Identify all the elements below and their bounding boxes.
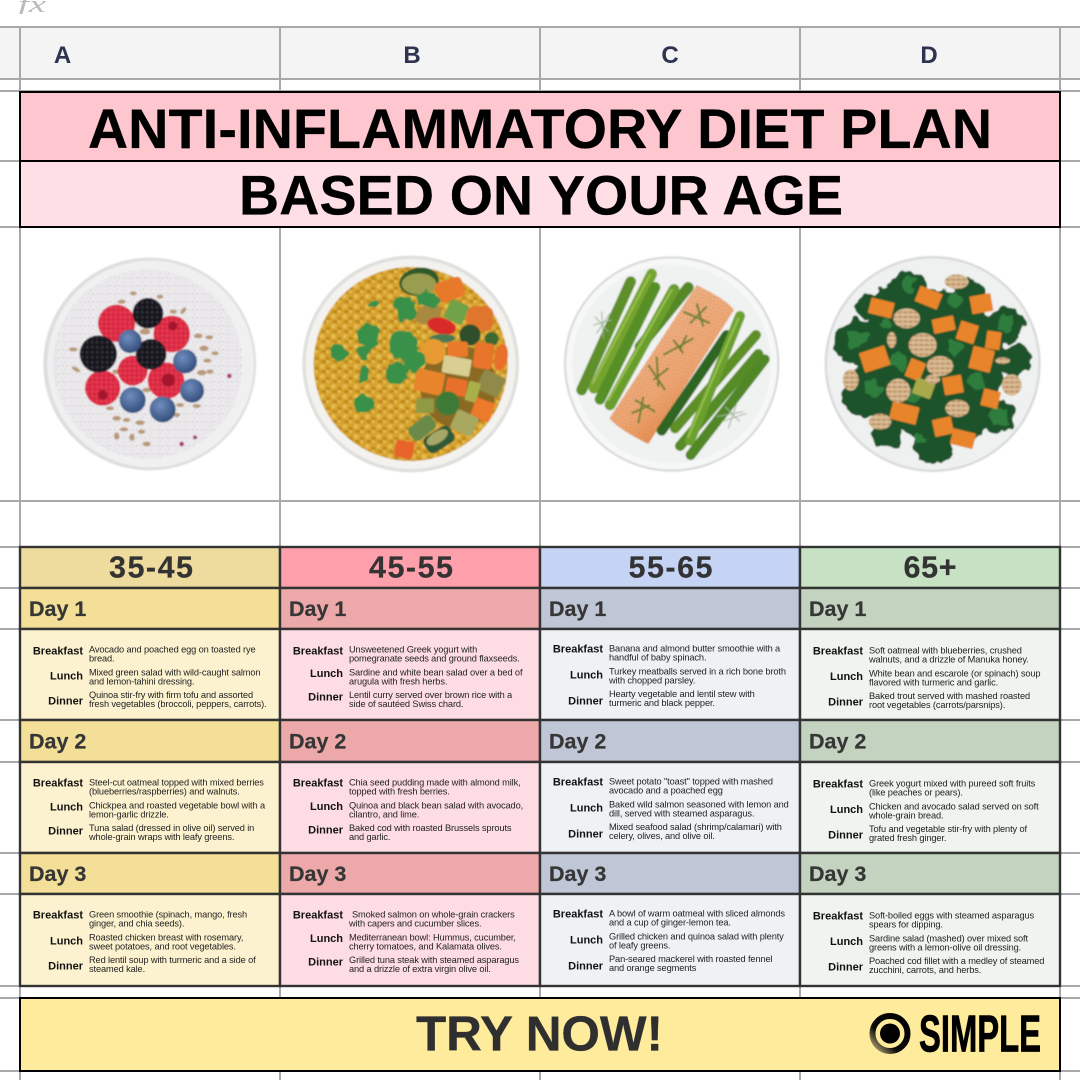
day 1 meals: and lemon-tahini dressing. (89, 676, 194, 686)
day 1 meals: Quinoa stir-fry with firm tofu and assorted (89, 690, 253, 700)
day 2 heading (280, 720, 540, 762)
simple logo (872, 1006, 1041, 1064)
spreadsheet column header bar: C (661, 42, 679, 69)
day 1 meals (20, 629, 280, 720)
day 1 meals: Hearty vegetable and lentil stew with (609, 689, 755, 699)
vegetables (394, 264, 510, 460)
spreadsheet column header bar: B (403, 42, 421, 69)
day 2 heading: Day 2 (809, 729, 866, 753)
day 2 meals: Breakfast (553, 776, 603, 788)
day 1 meals: walnuts, and a drizzle of Manuka honey. (868, 655, 1029, 665)
day 2 meals: Mixed seafood salad (shrimp/calamari) with (609, 822, 782, 832)
panel: age 45-55 (280, 547, 540, 986)
day 1 meals: Lentil curry served over brown rice with a (349, 690, 513, 700)
day 1 meals: Turkey meatballs served in a rich bone broth (609, 666, 786, 676)
day 2 meals: Breakfast (33, 778, 83, 790)
day 2 meals: Dinner (48, 826, 84, 838)
day 1 meals (800, 629, 1060, 720)
day 1 meals: Lunch (50, 670, 83, 682)
day 3 heading (800, 853, 1060, 894)
day 3 meals: greens with a lemon-olive oil dressing. (869, 942, 1021, 952)
day 3 meals: A bowl of warm oatmeal with sliced almonds (609, 909, 785, 919)
day 1 meals: Breakfast (813, 646, 863, 658)
day 1 meals: Breakfast (33, 645, 83, 657)
title (20, 92, 1060, 227)
day 2 meals: (like peaches or pears). (869, 788, 963, 798)
day 1 heading (800, 588, 1060, 629)
day 1 heading: Day 1 (289, 597, 346, 621)
day 3 heading (20, 853, 280, 894)
day 1 meals: Sardine and white bean salad over a bed of (349, 667, 523, 677)
day 2 meals: Steel-cut oatmeal topped with mixed berries (89, 778, 264, 788)
kale (834, 272, 1031, 464)
age header 35-45: 35-45 (109, 550, 193, 584)
day 3 meals: and a drizzle of extra virgin olive oil. (349, 964, 491, 974)
left asparagus (582, 274, 688, 405)
day 2 meals: Dinner (568, 829, 604, 841)
day 2 meals: grated fresh ginger. (869, 833, 946, 843)
day 1 heading (280, 588, 540, 629)
spreadsheet column header bar (0, 28, 1080, 79)
day 2 meals (280, 762, 540, 853)
day 1 meals: Lunch (570, 670, 603, 682)
day 1 meals: Dinner (308, 692, 344, 704)
day 1 meals: Lunch (310, 668, 343, 680)
day 1 heading (540, 588, 800, 629)
day 3 meals (800, 894, 1060, 986)
day 3 meals: Dinner (568, 961, 604, 973)
right asparagus (662, 316, 765, 455)
day 1 meals: Breakfast (293, 645, 343, 657)
day 1 meals: Mixed green salad with wild-caught salmon (89, 667, 260, 677)
day 2 meals: celery, olives, and olive oil. (609, 831, 715, 841)
day 3 meals: and orange segments (609, 963, 697, 973)
cilantro (330, 290, 436, 413)
day 2 meals: Breakfast (293, 778, 343, 790)
age header 65+ (800, 547, 1060, 588)
day 3 meals (20, 894, 280, 986)
day 3 meals: Green smoothie (spinach, mango, fresh (89, 910, 247, 920)
day 2 meals: lemon-garlic drizzle. (89, 809, 169, 819)
day 3 meals: Dinner (828, 962, 864, 974)
day 2 meals: Baked wild salmon seasoned with lemon and (609, 799, 789, 809)
day 2 meals: Breakfast (813, 779, 863, 791)
day 2 meals: whole-grain bread. (868, 810, 943, 820)
day 1 meals: Dinner (568, 696, 604, 708)
day 3 meals: Dinner (308, 957, 344, 969)
day 2 meals: Lunch (570, 803, 603, 815)
day 2 meals: Baked cod with roasted Brussels sprouts (349, 823, 512, 833)
day 1 heading: Day 1 (809, 597, 866, 621)
day 1 meals (280, 629, 540, 720)
day 1 meals: Banana and almond butter smoothie with a (609, 644, 781, 654)
day 3 meals: spears for dipping. (869, 920, 943, 930)
day 2 heading: Day 2 (549, 729, 606, 753)
title line 2 (20, 161, 1060, 227)
age header 45-55: 45-55 (369, 550, 453, 584)
day 1 meals: root vegetables (carrots/parsnips). (869, 700, 1005, 710)
day 3 meals: with capers and cucumber slices. (348, 919, 481, 929)
day 3 meals: Dinner (48, 961, 84, 973)
panel: age 35-45 (20, 547, 280, 986)
day 2 meals: Lunch (310, 801, 343, 813)
day 3 meals: sweet potatoes, and root vegetables. (89, 941, 236, 951)
day 2 meals: avocado and a poached egg (609, 786, 723, 796)
day 2 meals: (blueberries/raspberries) and walnuts. (89, 787, 240, 797)
day 1 meals: Baked trout served with mashed roasted (869, 691, 1030, 701)
day 1 meals (540, 629, 800, 720)
blueberries (118, 330, 204, 422)
day 3 meals: Poached cod fillet with a medley of steamed (869, 956, 1044, 966)
day 1 meals: with chopped parsley. (608, 675, 695, 685)
day 3 meals: cherry tomatoes, and Kalamata olives. (349, 941, 502, 951)
walnuts (843, 274, 1022, 430)
food photo: chickpea curry bowl with vegetables (302, 256, 519, 472)
day 2 meals: Quinoa and black bean salad with avocado, (349, 800, 523, 810)
day 2 meals (540, 762, 800, 853)
day 3 heading: Day 3 (289, 862, 346, 886)
day 3 meals: Soft-boiled eggs with steamed asparagus (869, 911, 1034, 921)
day 1 meals: pomegranate seeds and ground flaxseeds. (349, 654, 520, 664)
food photo: salmon fillet with asparagus on plate (564, 256, 779, 472)
day 2 meals: Chicken and avocado salad served on soft (869, 801, 1039, 811)
day 3 meals (540, 894, 800, 986)
day 3 meals: Lunch (570, 935, 603, 947)
day 2 meals: Greek yogurt mixed with pureed soft fruits (869, 779, 1036, 789)
day 1 meals: turmeric and black pepper. (609, 698, 715, 708)
day 2 heading (540, 720, 800, 762)
day 1 meals: White bean and escarole (or spinach) soup (869, 668, 1040, 678)
day 3 meals: Sardine salad (mashed) over mixed soft (869, 933, 1028, 943)
try now text: TRY NOW! (416, 1007, 663, 1062)
day 1 meals: Breakfast (553, 643, 603, 655)
day 3 meals: steamed kale. (89, 964, 145, 974)
panel: age 55-65 (540, 547, 800, 986)
sweet potato (859, 285, 1002, 449)
day 3 heading: Day 3 (809, 862, 866, 886)
day 2 meals: Dinner (308, 825, 344, 837)
day 2 meals (800, 762, 1060, 853)
day 2 meals (20, 762, 280, 853)
day 1 meals: bread. (89, 654, 115, 664)
day 3 meals: of leafy greens. (609, 940, 670, 950)
day 2 meals: Lunch (830, 804, 863, 816)
day 2 meals: Chickpea and roasted vegetable bowl with a (89, 800, 266, 810)
day 3 meals: Lunch (310, 933, 343, 945)
day 2 heading: Day 2 (29, 729, 86, 753)
day 1 meals: flavored with turmeric and garlic. (869, 677, 998, 687)
day 3 meals: and a cup of ginger-lemon tea. (609, 918, 731, 928)
day 1 meals: handful of baby spinach. (609, 653, 706, 663)
day 3 meals: Breakfast (553, 909, 603, 921)
day 2 meals: and garlic. (349, 832, 390, 842)
day 1 meals: Lunch (830, 671, 863, 683)
day 1 meals: Soft oatmeal with blueberries, crushed (869, 646, 1022, 656)
call to action banner (20, 998, 1060, 1071)
day 3 meals: zucchini, carrots, and herbs. (869, 965, 981, 975)
day 2 heading (20, 720, 280, 762)
day 3 meals: Smoked salmon on whole-grain crackers (352, 910, 515, 920)
day 1 meals: arugula with fresh herbs. (349, 676, 447, 686)
day 3 heading: Day 3 (29, 862, 86, 886)
day 3 heading (280, 853, 540, 894)
day 3 heading: Day 3 (549, 862, 606, 886)
day 2 meals: Tuna salad (dressed in olive oil) served in (89, 823, 254, 833)
day 1 meals: Dinner (48, 696, 84, 708)
age header 55-65: 55-65 (628, 550, 713, 584)
day 1 heading: Day 1 (29, 597, 86, 621)
blackberries (80, 298, 166, 373)
day 2 meals: whole-grain wraps with leafy greens. (88, 832, 234, 842)
day 3 meals: Lunch (50, 935, 83, 947)
day 1 meals: Dinner (828, 697, 864, 709)
day 1 meals: Unsweetened Greek yogurt with (349, 645, 477, 655)
day 1 heading: Day 1 (549, 597, 606, 621)
panel: age 65+ (800, 547, 1060, 986)
day 2 heading: Day 2 (289, 729, 346, 753)
day 3 meals: Grilled tuna steak with steamed asparagus (349, 955, 519, 965)
day 3 meals (280, 894, 540, 986)
age header 35-45 (20, 547, 280, 588)
day 3 meals: Breakfast (33, 910, 83, 922)
day 2 meals: dill, served with steamed asparagus. (609, 808, 754, 818)
day 2 meals: Dinner (828, 830, 864, 842)
spreadsheet column header bar: D (920, 42, 938, 69)
day 2 meals: cilantro, and lime. (349, 809, 419, 819)
day 1 meals: fresh vegetables (broccoli, peppers, carrots). (89, 699, 267, 709)
day 2 meals: topped with fresh berries. (349, 787, 450, 797)
title line 1: ANTI-INFLAMMATORY DIET PLAN (88, 98, 992, 160)
day 3 meals: Mediterranean bowl: Hummus, cucumber, (349, 932, 516, 942)
day 2 meals: Sweet potato "toast" topped with mashed (609, 777, 773, 787)
salmon (609, 285, 734, 444)
day 2 meals: Tofu and vegetable stir-fry with plenty of (869, 824, 1027, 834)
raspberries (85, 305, 190, 406)
day 2 heading (800, 720, 1060, 762)
day 2 meals: Lunch (50, 802, 83, 814)
day 3 meals: Lunch (830, 936, 863, 948)
day 1 meals: side of sautéed Swiss chard. (349, 699, 463, 709)
day 3 heading (540, 853, 800, 894)
day 1 meals: Avocado and poached egg on toasted rye (89, 645, 256, 655)
day 3 meals: Breakfast (293, 910, 343, 922)
day 1 heading (20, 588, 280, 629)
day 3 meals: Breakfast (813, 911, 863, 923)
food photo: kale salad with sweet potato and walnuts (825, 256, 1041, 472)
age header 45-55 (280, 547, 540, 588)
age header 65+: 65+ (904, 550, 956, 584)
day 3 meals: ginger, and chia seeds). (89, 919, 184, 929)
day 2 meals: Chia seed pudding made with almond milk, (349, 778, 521, 788)
title line 2: BASED ON YOUR AGE (239, 164, 843, 226)
spreadsheet column header bar: A (54, 42, 71, 69)
food photo: chia pudding bowl with berries (43, 258, 256, 470)
day 3 meals: Red lentil soup with turmeric and a side of (89, 955, 256, 965)
day 3 meals: Pan-seared mackerel with roasted fennel (609, 954, 773, 964)
day 3 meals: Grilled chicken and quinoa salad with plenty (609, 931, 784, 941)
day 3 meals: Roasted chicken breast with rosemary, (89, 932, 243, 942)
dill (593, 312, 747, 428)
age header 55-65 (540, 547, 800, 588)
